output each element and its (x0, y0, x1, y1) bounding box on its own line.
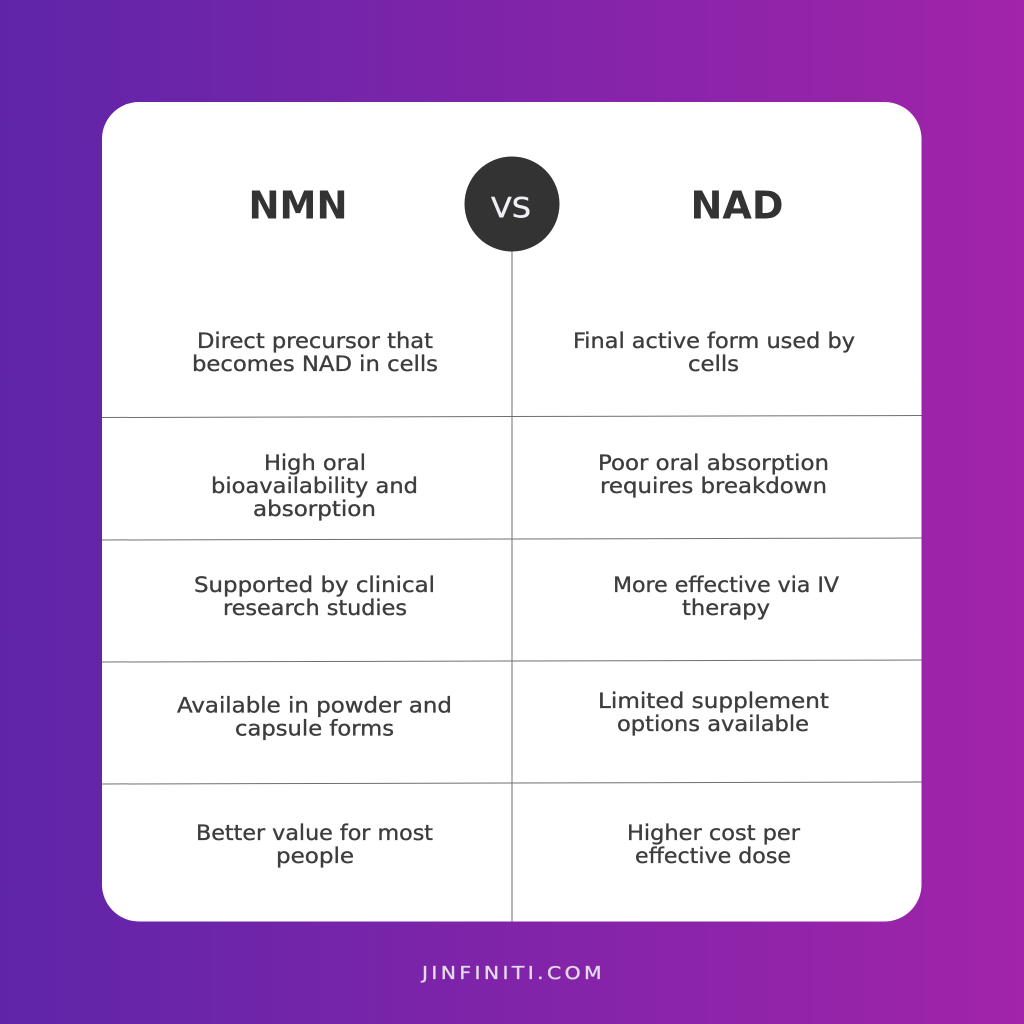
text: NMN row 2: bioavailability and (211, 474, 418, 498)
panel: comparison card (102, 102, 922, 922)
text: NMN row 3 (194, 573, 435, 620)
text: NMN row 3: research studies (223, 596, 407, 620)
text: NAD row 5: Higher cost per (627, 821, 800, 845)
text: NAD row 5 (627, 821, 800, 868)
text: NAD row 1: cells (688, 352, 739, 376)
heading: NMN: NMN (248, 184, 348, 228)
text: NAD row 1 (573, 329, 855, 376)
text: NMN row 4: Available in powder and (177, 694, 452, 718)
text: NAD row 1: Final active form used by (573, 329, 855, 353)
icon: VS badge (464, 156, 560, 252)
text: NMN row 5: people (276, 844, 354, 868)
text: NMN row 3: Supported by clinical (194, 573, 435, 597)
text: NAD row 4 (598, 689, 829, 736)
text: NAD row 4: options available (617, 712, 809, 736)
text: NAD row 4: Limited supplement (598, 689, 829, 713)
text: NAD row 2 (598, 451, 829, 498)
text: NAD row 3 (613, 573, 840, 620)
text: NAD row 2: Poor oral absorption (598, 451, 829, 475)
text: NMN row 4: capsule forms (235, 716, 394, 740)
text: NMN row 2 (211, 451, 418, 521)
text: NMN row 2: High oral (264, 451, 366, 475)
text: NMN row 5: Better value for most (196, 821, 433, 845)
heading: NAD: NAD (690, 184, 784, 228)
text: NAD row 3: More effective via IV (613, 573, 840, 597)
text: NMN row 2: absorption (253, 497, 376, 521)
text: NAD row 5: effective dose (635, 844, 791, 868)
text: NAD row 2: requires breakdown (600, 474, 827, 498)
text: NMN row 1 (192, 329, 438, 376)
icon: VS badge: VS (491, 191, 531, 224)
text: NMN row 1: Direct precursor that (197, 329, 433, 353)
text: NAD row 3: therapy (682, 596, 770, 620)
text: NMN row 5 (196, 821, 433, 868)
footer: website: JINFINITI.COM (421, 963, 605, 984)
text: NMN row 1: becomes NAD in cells (192, 352, 438, 376)
text: NMN row 4 (177, 694, 452, 740)
